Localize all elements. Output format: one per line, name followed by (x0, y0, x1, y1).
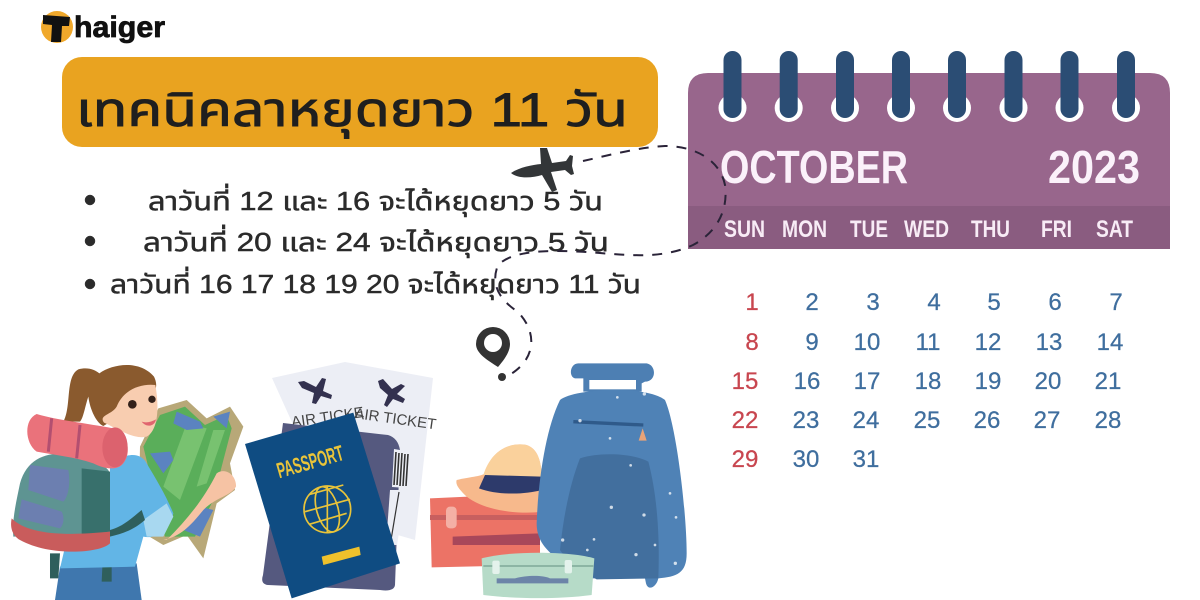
backpack (13, 453, 110, 537)
illustration: passport: PASSPORT (274, 440, 347, 483)
calendar dates: 23 (793, 407, 819, 434)
calendar dates: 20 (1035, 368, 1061, 395)
calendar dates: 11 (916, 329, 940, 356)
calendar dates: 3 (866, 289, 880, 316)
calendar dates: 8 (745, 329, 759, 356)
calendar dates: 16 (794, 368, 820, 395)
calendar dates: 15 (732, 368, 758, 395)
shirt (60, 455, 173, 568)
illustration: traveler woman with backpack and map (11, 365, 243, 600)
calendar dates: 12 (975, 329, 1001, 356)
calendar dates: 14 (1097, 329, 1123, 356)
arm (163, 471, 236, 540)
calendar dates: 31 (853, 446, 879, 473)
illustration: luggage and hat (430, 363, 687, 598)
calendar dates: 22 (732, 407, 758, 434)
hair (63, 365, 156, 426)
bullet list: ลาวันที่ 16 17 18 19 20 จะได้หยุดยาว 11 วัน (110, 266, 641, 300)
calendar dates (732, 289, 1123, 473)
bullet list: ลาวันที่ 20 และ 24 จะได้หยุดยาว 5 วัน (143, 224, 609, 258)
calendar dates: 1 (745, 289, 759, 316)
calendar header: SAT (1096, 216, 1133, 243)
icon: location pin (476, 327, 510, 381)
calendar dates: 17 (854, 368, 880, 395)
calendar header: 2023 (1048, 141, 1140, 193)
calendar header: MON (782, 216, 827, 243)
bullet list: ลาวันที่ 12 และ 16 จะได้หยุดยาว 5 วัน (148, 183, 603, 217)
calendar dates: 21 (1095, 368, 1121, 395)
bedroll (27, 414, 128, 468)
legs (55, 563, 142, 600)
calendar dates: 5 (987, 289, 1001, 316)
calendar dates: 7 (1109, 289, 1123, 316)
dashed flight path (495, 146, 726, 376)
calendar dates: 4 (927, 289, 941, 316)
red suitcase (430, 493, 540, 567)
calendar header: OCTOBER (720, 141, 908, 193)
calendar header (688, 51, 1170, 249)
map (138, 400, 243, 558)
calendar dates: 2 (805, 289, 819, 316)
calendar dates: 29 (732, 446, 758, 473)
calendar dates: 19 (975, 368, 1001, 395)
blue backpack (571, 363, 654, 392)
title banner (62, 57, 658, 147)
straps (50, 547, 112, 582)
calendar dates: 30 (793, 446, 819, 473)
hat (456, 444, 543, 513)
calendar header: FRI (1041, 216, 1072, 243)
illustration: air tickets (272, 362, 437, 540)
calendar dates: 6 (1048, 289, 1062, 316)
illustration: air tickets: AIR TICKET (353, 405, 437, 433)
bullet list (85, 183, 641, 300)
calendar dates: 10 (854, 329, 880, 356)
illustration: passport (245, 413, 400, 598)
calendar header: TUE (850, 216, 888, 243)
calendar dates: 25 (914, 407, 940, 434)
calendar header: WED (904, 216, 949, 243)
title banner: เทคนิคลาหยุดยาว 11 วัน (76, 83, 628, 138)
logo: Thaiger: haiger (74, 11, 165, 44)
calendar dates: 13 (1036, 329, 1062, 356)
calendar header: THU (971, 216, 1010, 243)
ticket barcode (386, 449, 412, 545)
calendar dates: 26 (974, 407, 1000, 434)
calendar dates: 28 (1095, 407, 1121, 434)
icon: airplane (511, 148, 574, 192)
green case (482, 553, 594, 598)
calendar header: SUN (724, 216, 765, 243)
calendar dates: 24 (853, 407, 879, 434)
calendar dates: 9 (805, 329, 819, 356)
calendar dates: 27 (1034, 407, 1060, 434)
illustration: air tickets: AIR TICKE (290, 404, 365, 431)
face (103, 385, 157, 437)
illustration: dark wallet (262, 423, 400, 590)
calendar dates: 18 (915, 368, 941, 395)
